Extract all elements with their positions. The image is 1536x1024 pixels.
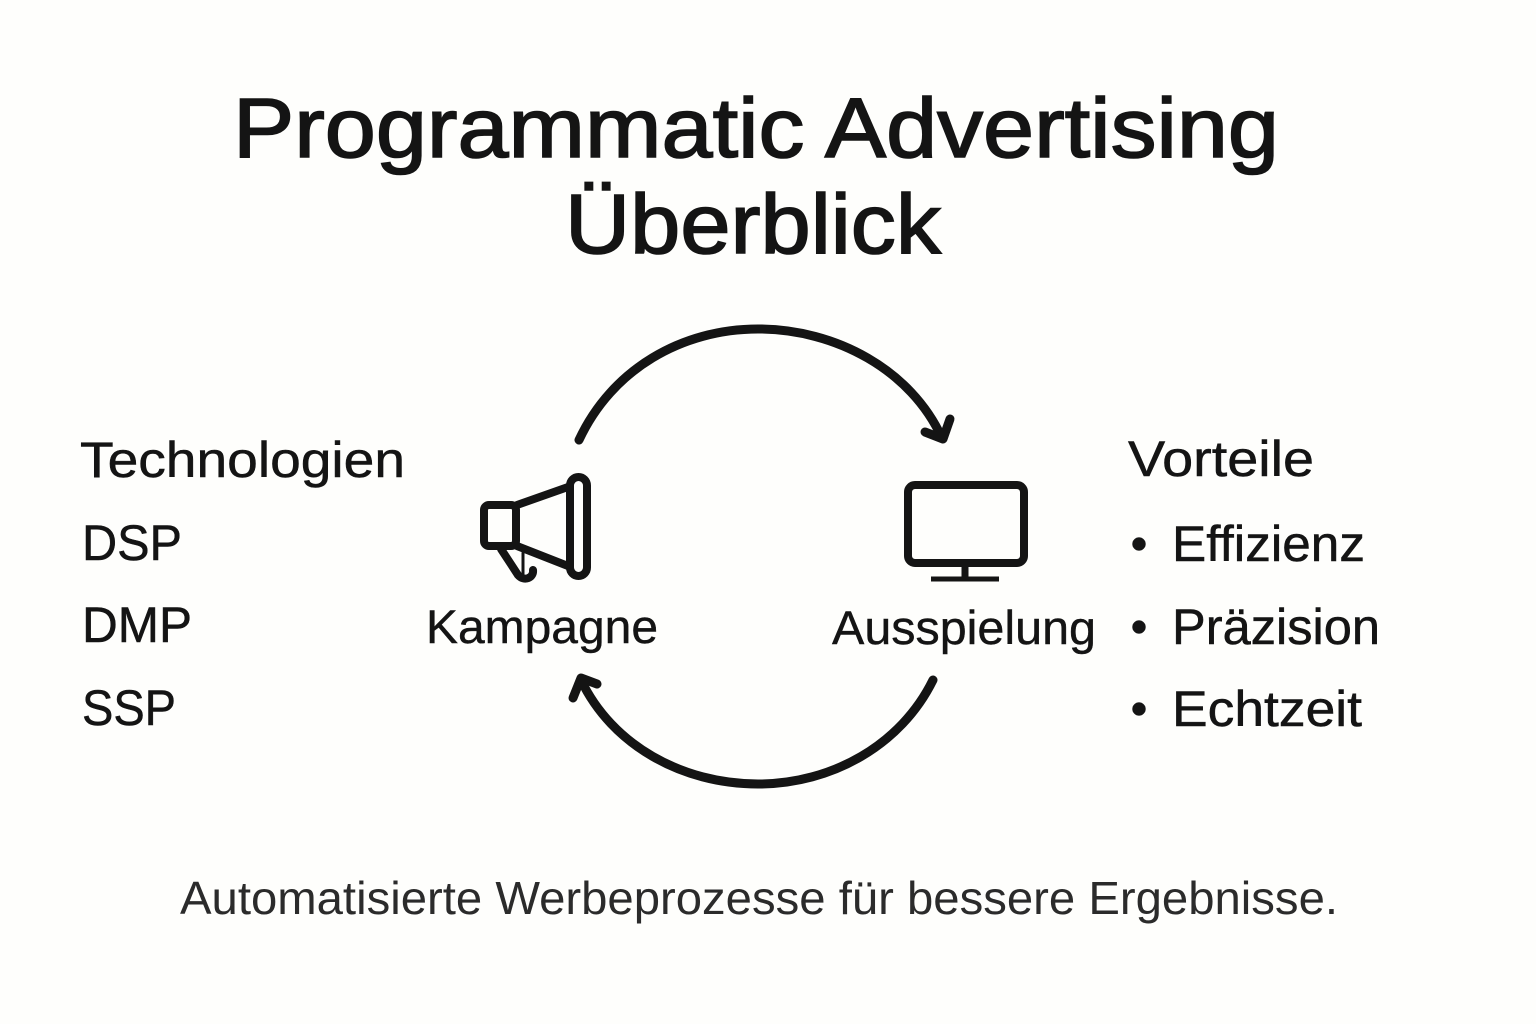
arrow: bottom, Ausspielung to Kampagne <box>573 678 933 784</box>
title: Überblick <box>565 177 942 271</box>
panel: Vorteile <box>1128 431 1380 737</box>
label: Kampagne: Kampagne <box>426 600 658 653</box>
footer text: Automatisierte Werbeprozesse für bessere Ergebnisse. <box>180 872 1338 924</box>
icon: monitor <box>908 485 1024 579</box>
panel: Technologien <box>80 432 405 736</box>
label: Ausspielung: Ausspielung <box>832 601 1096 654</box>
panel: Technologien: SSP <box>82 680 176 736</box>
title: Programmatic Advertising <box>233 81 1279 175</box>
panel: Technologien: Technologien <box>80 432 405 488</box>
panel: Vorteile: Vorteile <box>1128 431 1314 487</box>
bullet list: Echtzeit <box>1172 681 1362 737</box>
panel: Technologien: DMP <box>82 597 192 653</box>
bullet list <box>1132 516 1380 737</box>
panel: Technologien: DSP <box>82 515 182 571</box>
title <box>233 81 1279 271</box>
arrow: top, Kampagne to Ausspielung <box>579 329 950 440</box>
bullet list: Effizienz <box>1172 516 1365 572</box>
icon: megaphone <box>484 477 587 579</box>
bullet list: Präzision <box>1172 599 1380 655</box>
